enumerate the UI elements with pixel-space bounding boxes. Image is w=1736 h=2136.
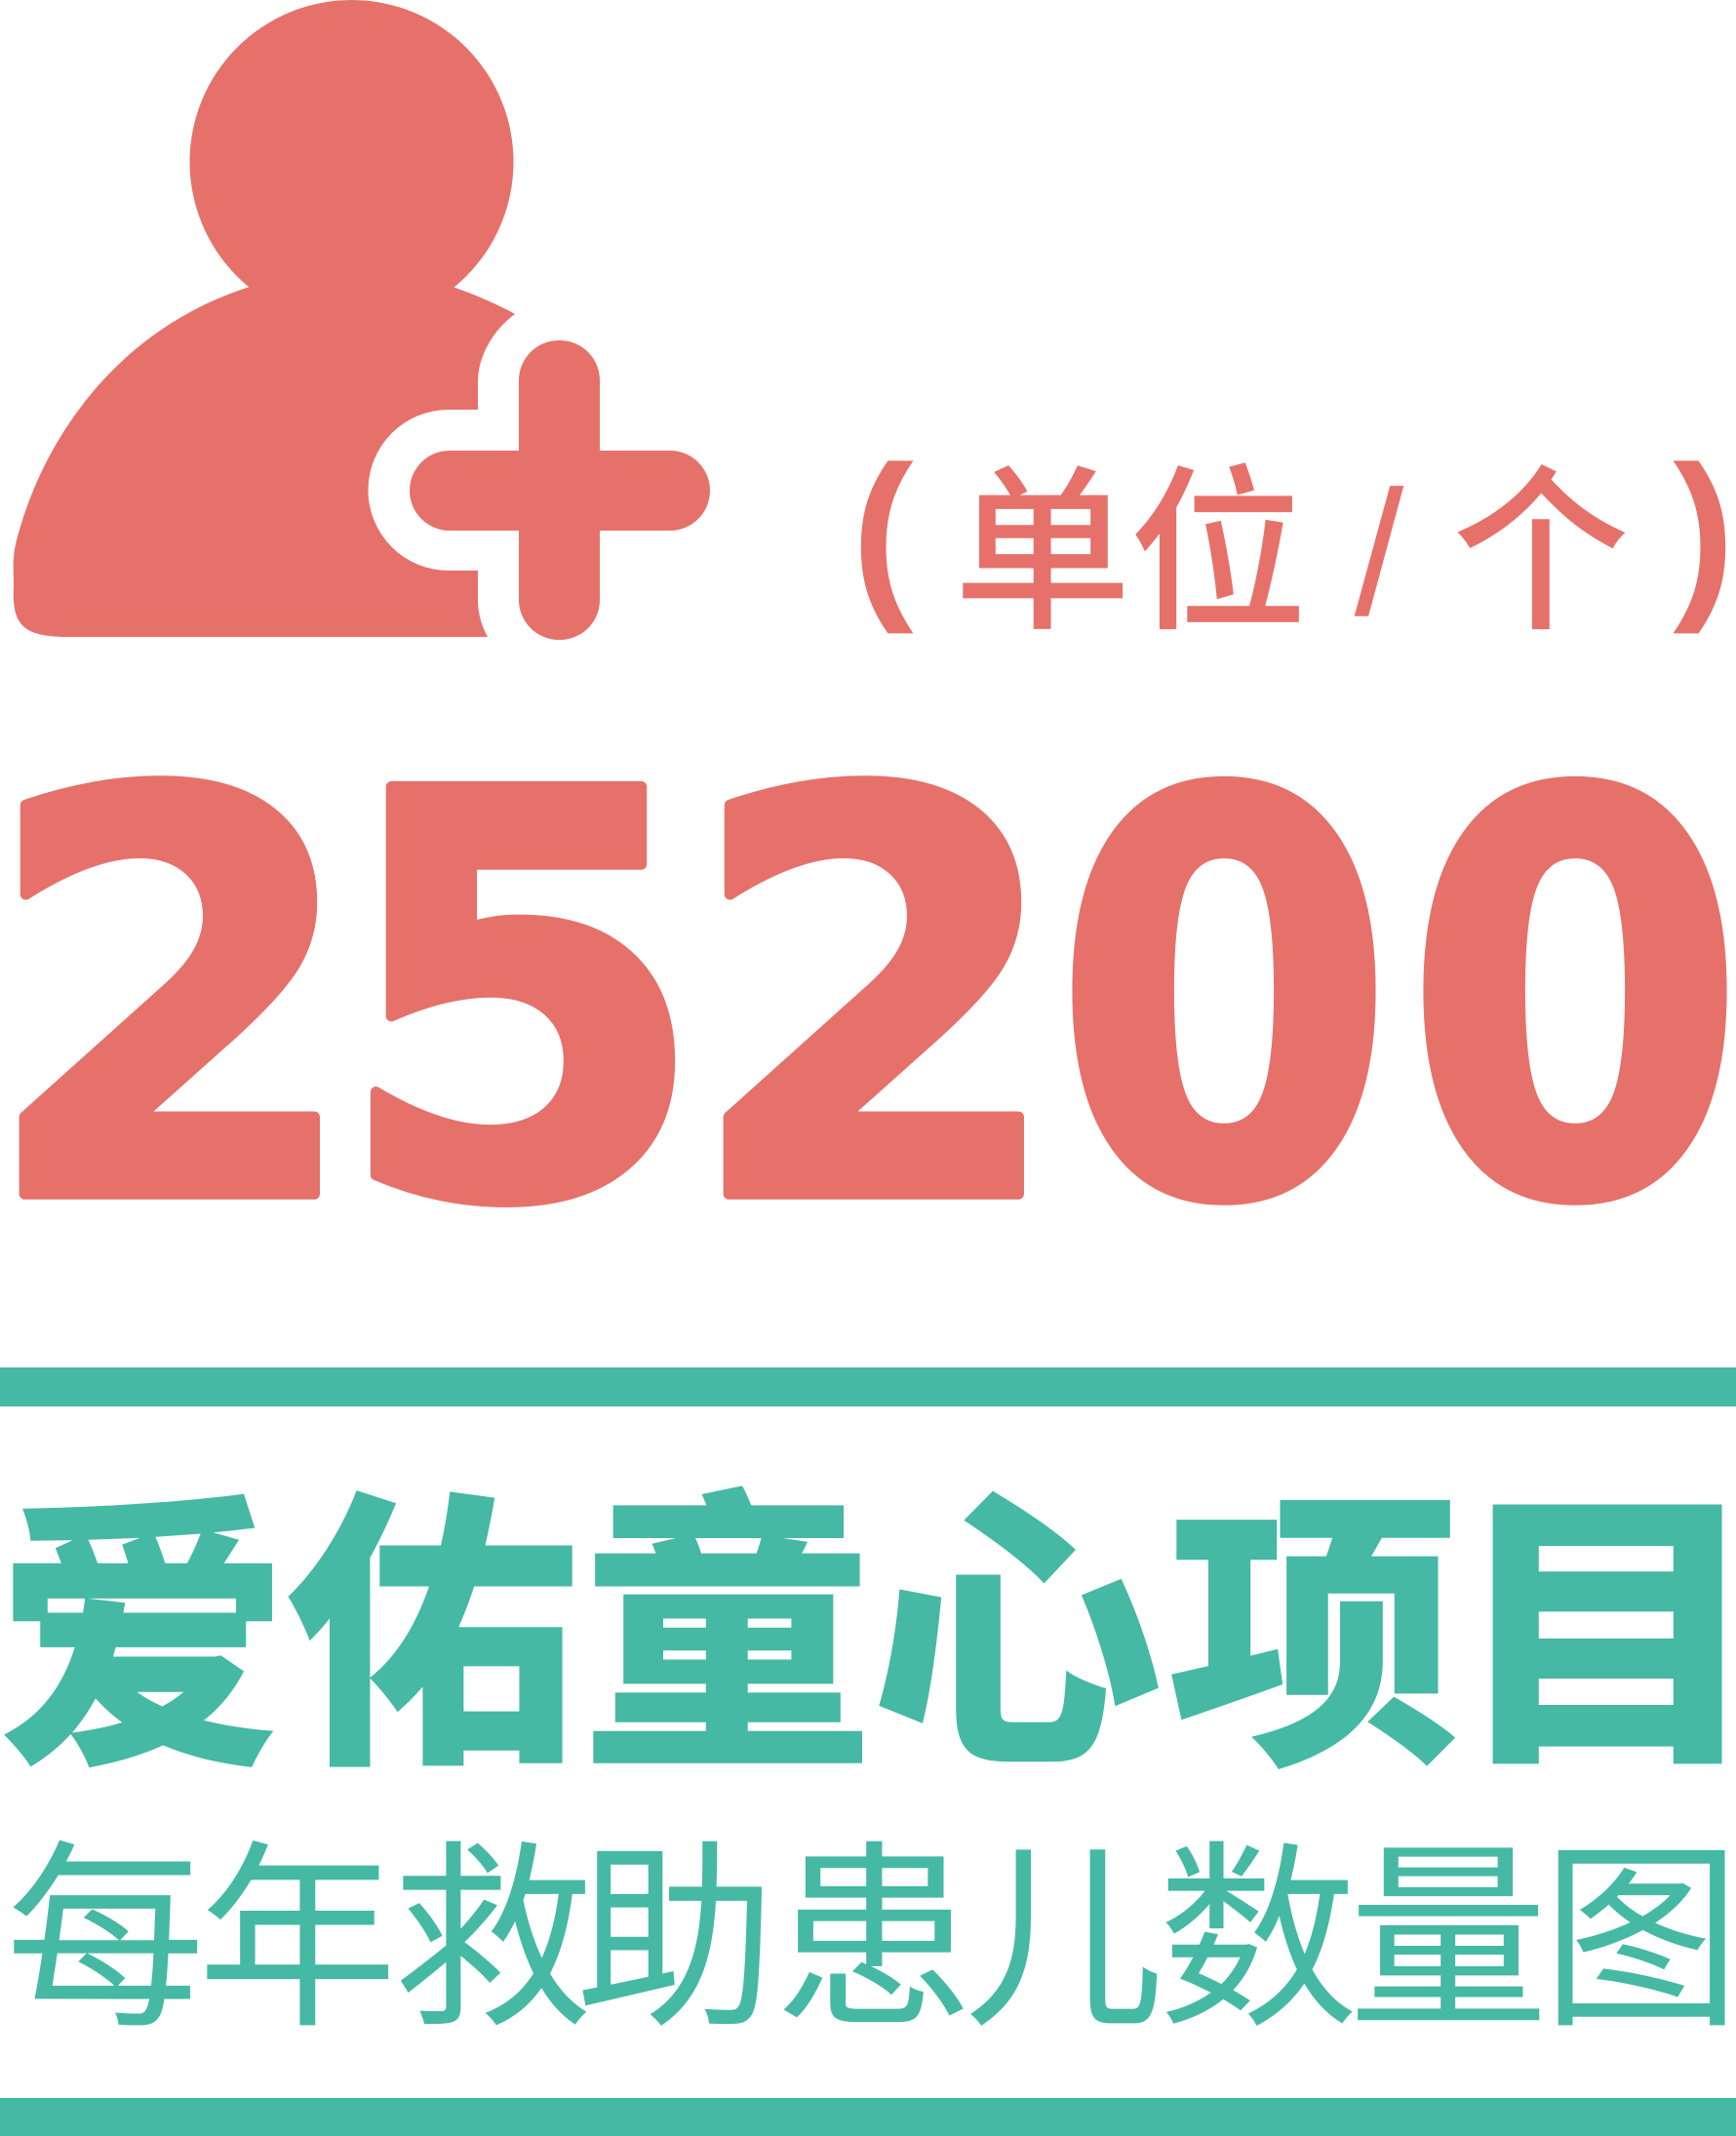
subtitle: 助 xyxy=(575,1829,776,2052)
big number 25200: 2 xyxy=(686,679,1066,1325)
subtitle: 儿 xyxy=(964,1829,1164,2052)
subtitle: 救 xyxy=(394,1829,593,2052)
green divider bottom xyxy=(0,2098,1736,2136)
unit label: 单 xyxy=(954,454,1131,653)
big number 25200 xyxy=(0,677,1736,1326)
subtitle: 量 xyxy=(1348,1829,1549,2052)
subtitle: 数 xyxy=(1159,1829,1358,2052)
big number 25200: 0 xyxy=(1054,680,1394,1323)
unit label: 个 xyxy=(1452,454,1630,653)
unit label: ) xyxy=(1673,428,1735,635)
title xyxy=(0,1475,1736,1802)
subtitle: 年 xyxy=(197,1829,398,2052)
subtitle: 图 xyxy=(1541,1829,1736,2052)
title: 佑 xyxy=(286,1475,578,1802)
unit label xyxy=(851,428,1735,653)
unit label: ( xyxy=(851,428,914,635)
green divider top xyxy=(0,1367,1736,1406)
subtitle: 每 xyxy=(6,1829,205,2052)
title: 项 xyxy=(1167,1475,1460,1802)
big number 25200: 0 xyxy=(1405,680,1736,1323)
big number 25200: 5 xyxy=(335,677,707,1326)
title: 童 xyxy=(581,1475,874,1802)
title: 心 xyxy=(870,1475,1163,1802)
subtitle xyxy=(6,1829,1736,2052)
unit label: 位 xyxy=(1129,454,1307,653)
unit label: / xyxy=(1355,454,1404,653)
title: 爱 xyxy=(0,1475,289,1802)
subtitle: 患 xyxy=(774,1829,973,2052)
icon: person with plus xyxy=(14,0,710,640)
